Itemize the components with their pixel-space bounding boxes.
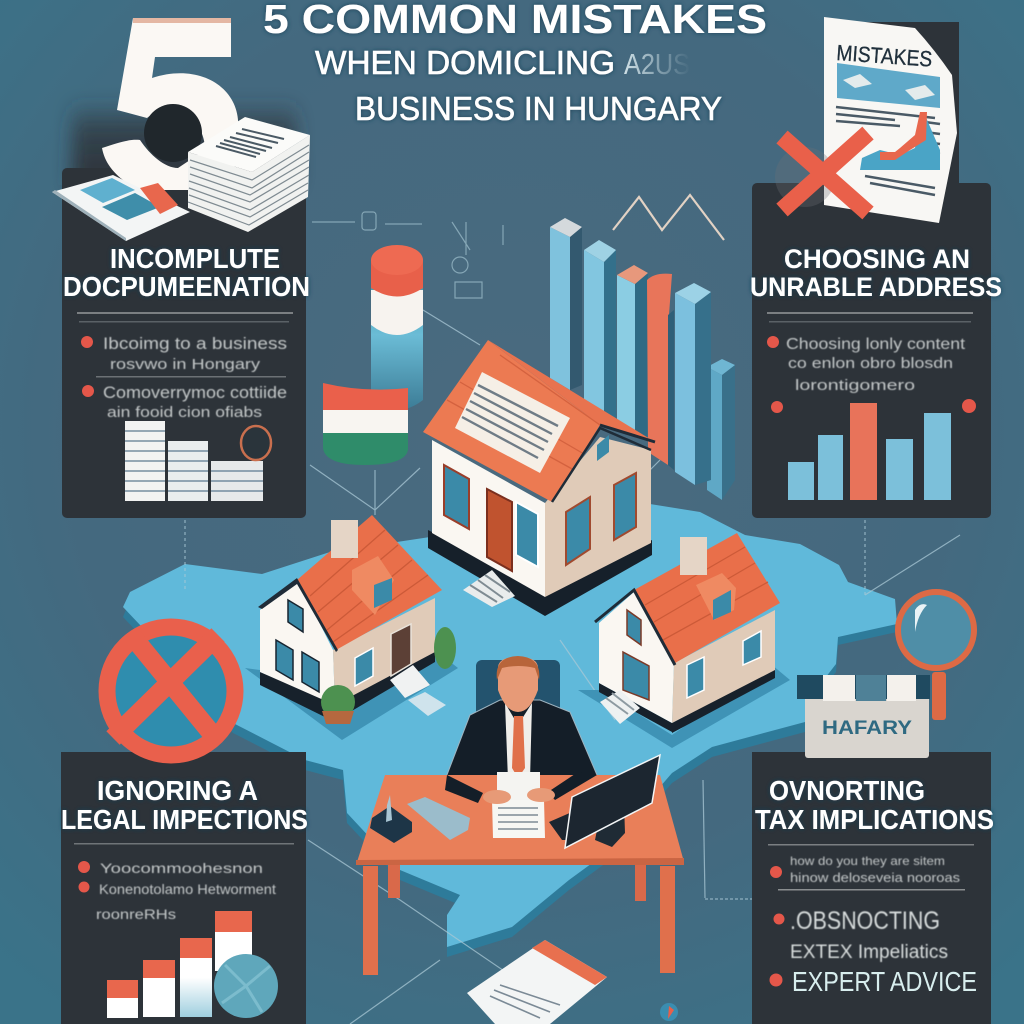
panel: ignoring legal implications xyxy=(61,752,308,1024)
desk keyboard xyxy=(407,797,470,840)
body text: lorontigomero xyxy=(795,377,915,394)
zigzag line xyxy=(613,195,724,240)
monitor xyxy=(549,755,660,848)
heading: TAX IMPLICATIONS xyxy=(755,804,994,835)
left house xyxy=(245,515,458,740)
body text: ain fooid cion ofiabs xyxy=(107,404,262,421)
right house xyxy=(578,533,790,748)
sleeves xyxy=(445,772,597,803)
body text: Konenotolamo Hetworment xyxy=(99,881,276,897)
isometric bar chart xyxy=(550,218,735,500)
heading: INCOMPLUTE xyxy=(110,243,280,274)
map of Hungary xyxy=(123,504,897,957)
chimney xyxy=(680,537,707,575)
icon: teal globe xyxy=(214,954,278,1018)
body text: how do you they are sitem xyxy=(790,854,945,868)
body text xyxy=(767,336,976,413)
body text xyxy=(81,334,287,421)
heading: OVNORTING xyxy=(769,775,925,806)
body text xyxy=(770,854,977,997)
person at desk xyxy=(445,656,597,795)
connector lines xyxy=(185,310,960,1024)
title: WHEN DOMICLING xyxy=(315,44,615,81)
heading: UNRABLE ADDRESS xyxy=(750,272,1002,302)
body text: co enlon obro blosdn xyxy=(788,355,953,372)
icon: magnifying glass xyxy=(898,592,974,720)
body text: roonreRHs xyxy=(96,906,176,922)
icon: Hungarian flag xyxy=(323,383,408,465)
stacked bars xyxy=(107,911,252,1018)
chair xyxy=(476,660,560,720)
head xyxy=(498,657,538,712)
body text xyxy=(78,860,276,922)
icon: paper stack xyxy=(188,117,310,232)
desk tray xyxy=(370,795,412,843)
shrubs xyxy=(321,627,456,724)
body text: EXTEX Impeliatics xyxy=(790,942,948,963)
heading xyxy=(750,244,1002,302)
body text: Comoverrymoc cottiide xyxy=(103,383,287,402)
heading: DOCPUMEENATION xyxy=(63,271,310,302)
sign: Hungary storefront: HAFARY xyxy=(822,718,912,739)
brochure on floor xyxy=(467,940,607,1024)
heading xyxy=(755,775,994,835)
heading xyxy=(61,775,308,835)
body text: Yoocommoohesnon xyxy=(100,860,263,876)
faint diagram marks xyxy=(312,212,503,298)
heading: LEGAL IMPECTIONS xyxy=(61,804,308,835)
heading: CHOOSING AN xyxy=(784,244,970,274)
small globe icon xyxy=(660,1003,678,1021)
desk xyxy=(356,755,684,975)
panel: overlooking tax implications xyxy=(752,752,994,1024)
roof document xyxy=(455,372,570,473)
suit xyxy=(445,700,597,795)
panel: incomplete documentation xyxy=(52,18,310,518)
heading xyxy=(63,243,310,302)
title: A2US xyxy=(624,49,690,81)
icon: tricolour cylinder xyxy=(371,245,423,410)
body text: Choosing lonly content xyxy=(786,336,966,353)
chimney xyxy=(331,520,358,558)
icon: mistakes document: MISTAKES xyxy=(836,40,933,72)
icon: coin stacks xyxy=(125,421,271,501)
icon: red X xyxy=(775,133,868,213)
desk paper xyxy=(483,772,555,838)
panel: choosing an unreliable address xyxy=(750,183,1002,518)
body text: .OBSNOCTING xyxy=(790,907,940,935)
icon: big number 5 xyxy=(102,18,238,190)
body text: hinow deloseveia nooroas xyxy=(790,870,961,885)
body text: Ibcoimg to a business xyxy=(103,334,287,353)
title: BUSINESS IN HUNGARY xyxy=(355,90,722,127)
title xyxy=(263,0,767,127)
icon: open brochure xyxy=(52,175,190,241)
heading: IGNORING A xyxy=(97,775,258,806)
icon: mistakes document xyxy=(824,17,959,223)
body text: EXPERT ADVICE xyxy=(792,966,977,997)
bar chart xyxy=(788,403,951,500)
central house xyxy=(423,340,655,616)
body text: rosvwo in Hongary xyxy=(110,356,261,373)
icon: prohibition sign xyxy=(107,627,235,755)
sign: Hungary storefront xyxy=(797,675,930,758)
